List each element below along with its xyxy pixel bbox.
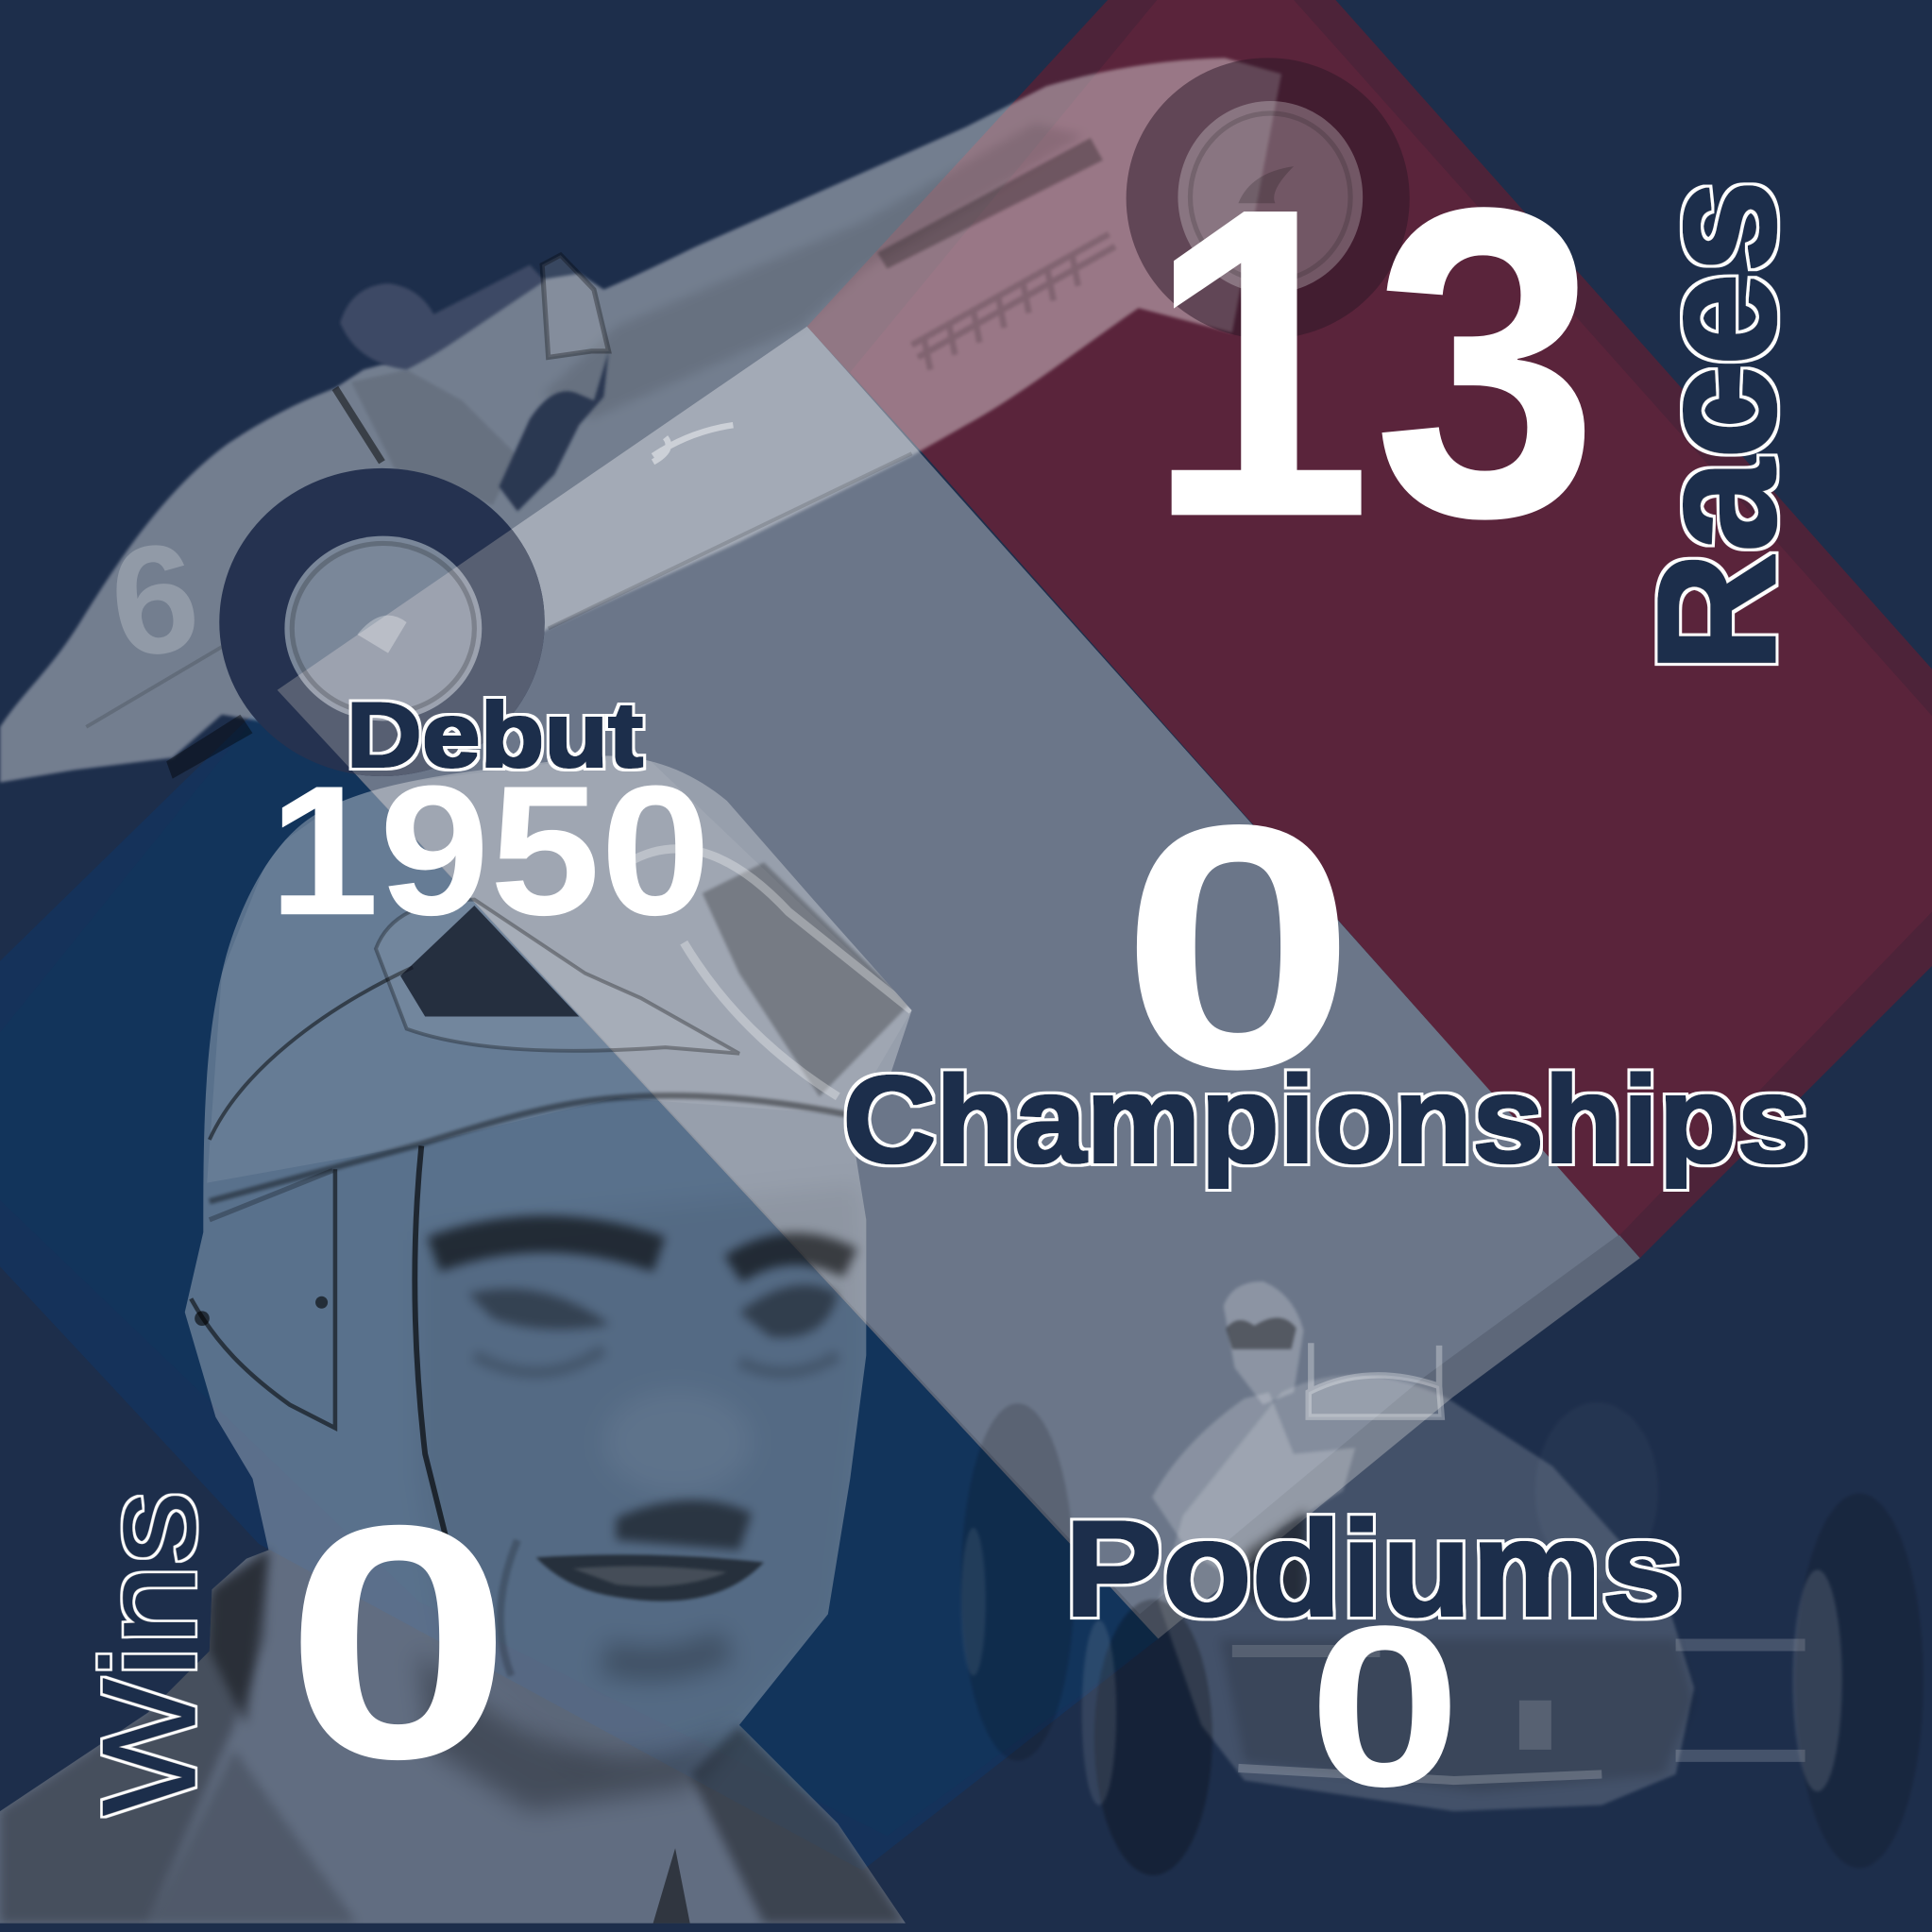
red band outer: [807, 0, 1932, 1258]
rear right tyre: [1535, 1402, 1658, 1580]
red band main: [850, 0, 1932, 1236]
driver body: [1152, 1392, 1355, 1577]
front hub ring: [292, 543, 474, 714]
neck shadow: [419, 1651, 739, 1811]
shadow under driver: [1245, 1509, 1306, 1602]
car nose number: 6: [100, 508, 209, 691]
championships number: 0: [1120, 753, 1357, 1141]
windscreen: [1309, 1343, 1442, 1417]
coat collar dark: [210, 1550, 268, 1725]
lower lip shadow: [603, 1645, 727, 1664]
front tyre over grey: [278, 529, 545, 776]
driver goggles: [1226, 1317, 1296, 1349]
right eye bag: [739, 1355, 838, 1372]
coat left: [0, 1550, 268, 1924]
ear flap outline: [191, 1169, 335, 1428]
car nose dark: [1220, 1638, 1694, 1793]
photo: racing car from front: [961, 1281, 1924, 1875]
helmet highlight: [208, 791, 659, 1182]
coat right: [690, 1725, 906, 1924]
front tyre: [219, 468, 545, 776]
goggle band: [628, 849, 912, 1096]
rear left wheel detail: [961, 1528, 986, 1676]
grey band main: [278, 327, 1619, 1614]
teeth: [573, 1567, 727, 1586]
wins number: 0: [284, 1456, 513, 1828]
car nose trim: [1238, 1768, 1602, 1781]
left eyebrow: [433, 1234, 659, 1254]
debut year: 1950: [268, 748, 711, 954]
photo: racing car from above: [0, 58, 1410, 783]
helmet strap line: [415, 1146, 449, 1552]
stat: debut: [268, 686, 711, 954]
front hub over grey: [298, 567, 482, 721]
coat collar left: [148, 1750, 357, 1924]
car upper body shade: [542, 123, 1084, 419]
blue band outer: [0, 690, 1159, 1871]
races label: Races: [1622, 180, 1810, 672]
front right tyre: [1795, 1493, 1924, 1868]
grey band outer: [278, 327, 1640, 1638]
championships label: Championships: [843, 1050, 1809, 1188]
wins label: Wins: [74, 1491, 223, 1816]
goggle right lens: [703, 862, 909, 1096]
podiums label: Podiums: [1064, 1494, 1683, 1645]
car body: [0, 58, 1281, 783]
suspension arms: [1232, 1645, 1805, 1755]
helmet brow edge: [210, 1095, 850, 1201]
car script badge: [653, 425, 733, 462]
rear hub badge: [1238, 166, 1294, 203]
races number: 13: [1146, 115, 1600, 608]
front hub: [284, 536, 482, 720]
rear hub ring: [1190, 113, 1350, 281]
shirt opening: [653, 1848, 690, 1924]
driver head: [1224, 1281, 1304, 1405]
windscreen: [542, 255, 609, 357]
front left tyre: [1094, 1600, 1212, 1875]
front hub badge: [357, 616, 407, 653]
podiums number: 0: [1309, 1579, 1462, 1835]
front left wheel detail: [1082, 1620, 1116, 1805]
goggle left lens: [400, 906, 579, 1016]
car body: [1159, 1375, 1694, 1811]
portrait base: [0, 739, 937, 1924]
driver torso: [351, 369, 517, 505]
goggle frame: [376, 900, 739, 1054]
stat: championships: [843, 753, 1809, 1188]
debut label: Debut: [347, 686, 643, 787]
stat: podiums: [1064, 1494, 1683, 1835]
rear hub: [1178, 101, 1363, 294]
moustache shadow: [616, 1500, 752, 1550]
left eye bag: [474, 1349, 603, 1372]
face shading: [759, 1197, 856, 1309]
cheek line: [500, 1540, 517, 1676]
rear tyre: [1127, 58, 1410, 339]
helmet seam: [210, 967, 413, 1140]
driver right arm: [499, 351, 609, 512]
right eyebrow: [733, 1249, 850, 1269]
front axle bracket: [166, 715, 252, 779]
rear left tyre: [961, 1403, 1075, 1761]
car louvres: [912, 234, 1115, 369]
mouth: [536, 1554, 764, 1602]
cowl plate: [1519, 1701, 1551, 1750]
front right wheel detail: [1793, 1569, 1842, 1791]
stat: races: [1146, 115, 1810, 672]
ear snap: [315, 1296, 328, 1309]
driver helmet and arm: [340, 265, 545, 369]
nose highlight: [603, 1390, 752, 1493]
right eye: [739, 1285, 838, 1337]
ear snap outer: [195, 1311, 210, 1326]
blue band main: [0, 690, 1159, 1836]
shoulder strap: [335, 388, 382, 462]
car side pipe: [877, 138, 1103, 268]
stat: wins: [74, 1456, 513, 1828]
left eye: [468, 1289, 610, 1330]
car panel seam: [86, 453, 912, 727]
helmet lower edge highlight: [210, 1171, 332, 1220]
photo: driver portrait: [0, 739, 937, 1924]
